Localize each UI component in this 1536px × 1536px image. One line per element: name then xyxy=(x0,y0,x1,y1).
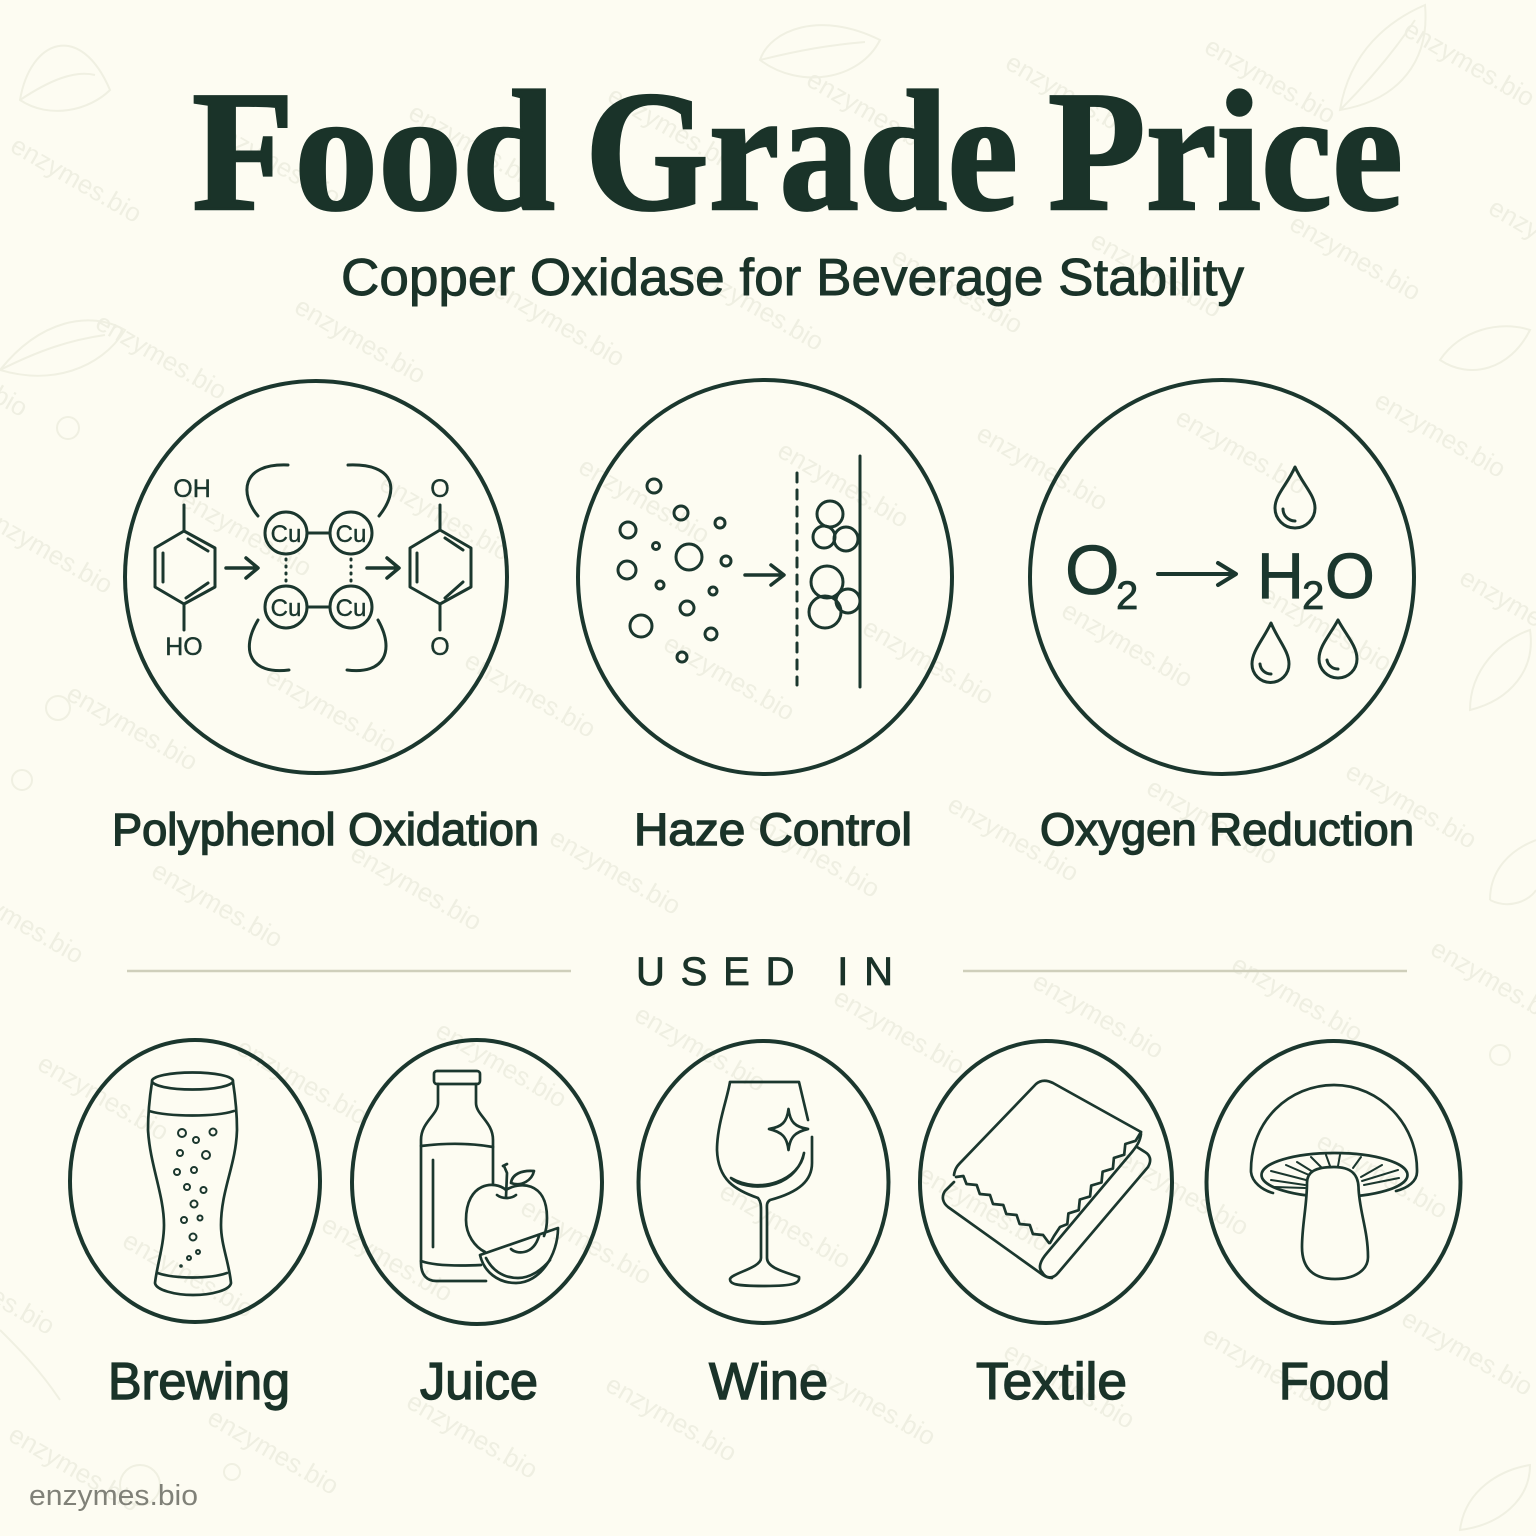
formula: H2O: O xyxy=(1325,540,1375,612)
background watermark text: enzymes.bio xyxy=(1171,402,1312,501)
icon: beer glass xyxy=(148,1072,237,1295)
icon: folded cloth xyxy=(943,1081,1150,1278)
background watermark text: enzymes.bio xyxy=(1200,31,1341,130)
circle frame xyxy=(1206,1041,1460,1323)
background watermark text: enzymes.bio xyxy=(1113,1143,1254,1242)
icon: filter with clumped particles xyxy=(797,456,860,687)
title: Grade xyxy=(585,57,1018,247)
footer watermark: enzymes.bio xyxy=(29,1480,198,1512)
arrow xyxy=(226,558,258,578)
background watermark text: enzymes.bio xyxy=(773,435,914,534)
arrow xyxy=(367,558,399,578)
background watermark text: enzymes.bio xyxy=(205,113,346,212)
label: Polyphenol Oxidation xyxy=(112,804,539,855)
icon: copper centres: Cu xyxy=(336,521,366,548)
icon: water drops xyxy=(1252,467,1357,682)
background watermark text: enzymes.bio xyxy=(630,999,771,1098)
background watermark text: enzymes.bio xyxy=(1397,1303,1536,1402)
label: Brewing xyxy=(108,1353,290,1411)
background watermark text: enzymes.bio xyxy=(574,451,715,550)
background watermark text: enzymes.bio xyxy=(972,418,1113,517)
background watermark text: enzymes.bio xyxy=(460,645,601,744)
background watermark text: enzymes.bio xyxy=(1256,579,1397,678)
icon: copper centres: Cu xyxy=(271,595,301,622)
background watermark text: enzymes.bio xyxy=(1399,14,1536,113)
background watermark text: enzymes.bio xyxy=(6,130,147,229)
icon: copper centres: Cu xyxy=(271,521,301,548)
background watermark text: enzymes.bio xyxy=(999,1336,1140,1435)
background watermark text: enzymes.bio xyxy=(203,1402,344,1501)
icon: hydroquinone molecule: OH xyxy=(173,475,211,503)
background watermark text: enzymes.bio xyxy=(118,1225,259,1324)
icon: wine glass xyxy=(717,1082,812,1286)
arrow xyxy=(745,565,784,585)
label: Juice xyxy=(420,1353,538,1411)
label: Food xyxy=(1279,1353,1390,1411)
background watermark text: enzymes.bio xyxy=(232,1032,373,1131)
formula: H2O: H xyxy=(1257,539,1304,612)
background watermark text: enzymes.bio xyxy=(261,661,402,760)
background watermark text: enzymes.bio xyxy=(176,484,317,583)
background watermark text: enzymes.bio xyxy=(91,307,232,406)
background watermark text: enzymes.bio xyxy=(317,1209,458,1308)
background watermark text: enzymes.bio xyxy=(147,855,288,954)
circle frame xyxy=(70,1040,320,1322)
background watermark text: enzymes.bio xyxy=(545,822,686,921)
background watermark text: enzymes.bio xyxy=(1227,949,1368,1048)
background watermark text: enzymes.bio xyxy=(375,468,516,567)
background watermark text: enzymes.bio xyxy=(659,628,800,727)
background watermark text: enzymes.bio xyxy=(603,80,744,179)
background watermark text: enzymes.bio xyxy=(1198,1320,1339,1419)
background watermark text: enzymes.bio xyxy=(1057,595,1198,694)
panel: polyphenol oxidation xyxy=(112,381,539,855)
label: Oxygen Reduction xyxy=(1040,804,1414,855)
background watermark text: enzymes.bio xyxy=(1028,966,1169,1065)
background watermark text: enzymes.bio xyxy=(62,678,203,777)
icon: quinone molecule: O xyxy=(430,475,450,503)
formula: H2O: 2 xyxy=(1302,574,1324,618)
background watermark text: enzymes.bio xyxy=(33,1048,174,1147)
label: Textile xyxy=(976,1353,1127,1411)
background watermark text: enzymes.bio xyxy=(1341,756,1482,855)
label: Wine xyxy=(709,1353,828,1411)
formula: O2: O xyxy=(1065,531,1119,609)
panel: textile xyxy=(920,1041,1172,1411)
circle frame xyxy=(578,380,952,774)
icon: copper centres xyxy=(247,465,391,671)
background watermark text: enzymes.bio xyxy=(290,291,431,390)
background watermark text: enzymes.bio xyxy=(402,1386,543,1485)
section heading: used in: USED IN xyxy=(636,950,893,994)
background watermark text: enzymes.bio xyxy=(744,805,885,904)
background watermark text: enzymes.bio xyxy=(829,982,970,1081)
label: Haze Control xyxy=(634,804,912,855)
background watermark text: enzymes.bio xyxy=(688,258,829,357)
title xyxy=(192,57,1403,247)
background watermark text: enzymes.bio xyxy=(858,612,999,711)
background watermark text: enzymes.bio xyxy=(802,64,943,163)
icon: hydroquinone molecule: HO xyxy=(165,633,203,661)
background watermark text: enzymes.bio xyxy=(943,789,1084,888)
circle frame xyxy=(352,1040,602,1324)
background watermark text: enzymes.bio xyxy=(489,274,630,373)
background watermark text: enzymes.bio xyxy=(1370,385,1511,484)
formula: O2: 2 xyxy=(1116,574,1138,618)
arrow xyxy=(1158,563,1236,585)
subtitle: Copper Oxidase for Beverage Stability xyxy=(341,249,1244,307)
icon: hydroquinone molecule xyxy=(155,475,215,661)
background watermark text: enzymes.bio xyxy=(914,1159,1055,1258)
background watermark text: enzymes.bio xyxy=(404,97,545,196)
circle frame xyxy=(638,1041,888,1323)
background watermark text: enzymes.bio xyxy=(715,1176,856,1275)
panel: wine xyxy=(638,1041,888,1411)
icon: juice bottle and apple xyxy=(421,1071,558,1283)
icon: copper centres: Cu xyxy=(336,595,366,622)
icon: mushroom xyxy=(1251,1085,1417,1279)
circle frame xyxy=(125,381,507,773)
background watermark text: enzymes.bio xyxy=(431,1015,572,1114)
panel: oxygen reduction xyxy=(1030,380,1414,855)
title: Food xyxy=(192,57,555,247)
background watermark text: enzymes.bio xyxy=(1285,208,1426,307)
background watermark text: enzymes.bio xyxy=(601,1369,742,1468)
background watermark text: enzymes.bio xyxy=(1086,225,1227,324)
circle frame xyxy=(920,1041,1172,1323)
panel: food xyxy=(1206,1041,1460,1411)
panel: juice xyxy=(352,1040,602,1411)
icon: suspended particles xyxy=(618,479,731,662)
background watermark text: enzymes.bio xyxy=(1312,1126,1453,1225)
background watermark text: enzymes.bio xyxy=(346,838,487,937)
background watermark text: enzymes.bio xyxy=(800,1353,941,1452)
background watermark text: enzymes.bio xyxy=(1001,47,1142,146)
background watermark text: enzymes.bio xyxy=(4,1419,145,1518)
background watermark text: enzymes.bio xyxy=(516,1192,657,1291)
panel: haze control xyxy=(578,380,952,855)
background watermark text: enzymes.bio xyxy=(1142,772,1283,871)
title: Price xyxy=(1048,57,1403,247)
background watermark text: enzymes.bio xyxy=(887,241,1028,340)
icon: quinone molecule: O xyxy=(430,633,450,661)
icon: quinone molecule xyxy=(410,475,471,661)
circle frame xyxy=(1030,380,1414,774)
panel: brewing xyxy=(70,1040,320,1411)
